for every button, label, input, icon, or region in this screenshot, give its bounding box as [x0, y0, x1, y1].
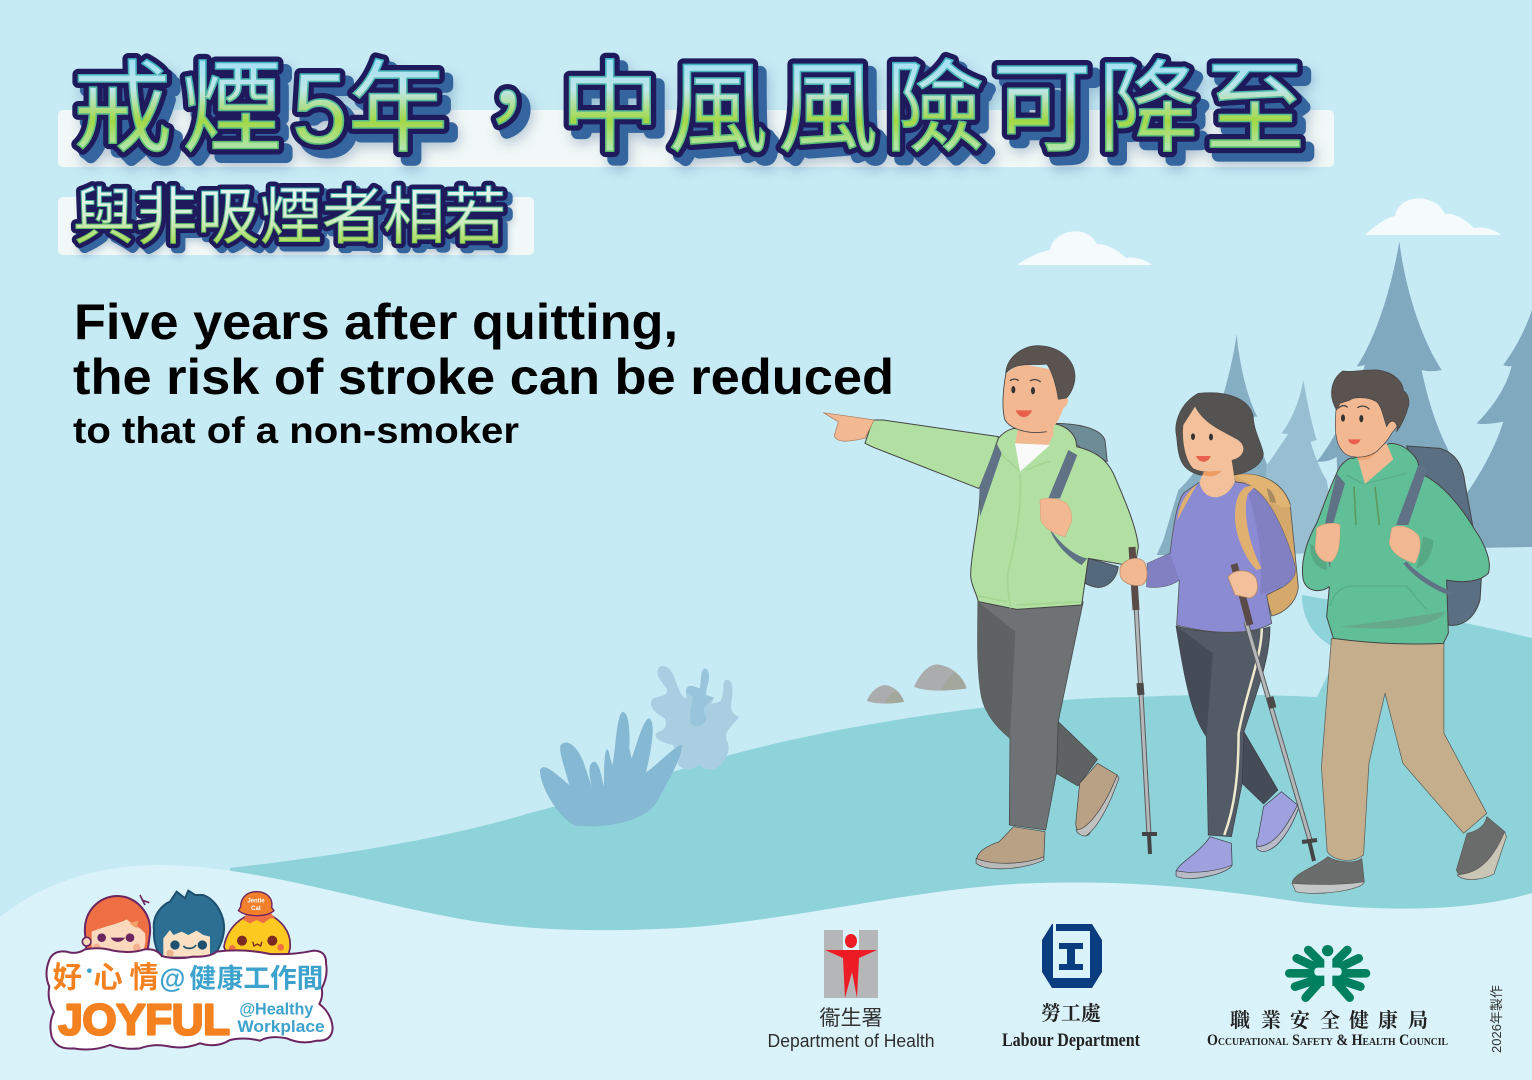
- rocks: [867, 664, 967, 704]
- chest hand: [1040, 498, 1072, 537]
- subtitle banner: white strip: [58, 197, 534, 255]
- hand on right pole: [1228, 571, 1258, 598]
- logo Chinese text: healthy workplace: @健康工作間: [159, 963, 323, 993]
- pointing arm: [865, 420, 998, 488]
- mascot: Jentle Cat: [224, 892, 290, 955]
- mascot: Jentle Cat: Cat: [251, 906, 261, 912]
- title banner: white strip: [58, 110, 1334, 167]
- title: Chinese headline: 戒煙5年，中風風險可降至: [72, 53, 1305, 165]
- logo: Occupational Safety and Health Council: 職業安全健康局: [1230, 1009, 1428, 1032]
- logo: Occupational Safety and Health Council: Occupational Safety & Health Council: [1207, 1032, 1448, 1049]
- icon: Labour Department mark: [1042, 924, 1102, 988]
- hill: pale foreground: [0, 865, 1532, 1080]
- icon: OSHC mark: [1289, 945, 1366, 1000]
- neck and shirt: [1015, 423, 1053, 445]
- mascot: girl: [82, 895, 150, 955]
- logo: Department of Health: 衞生署: [820, 1007, 882, 1030]
- upper body: [1302, 370, 1489, 644]
- subtitle: Chinese line: 與非吸煙者相若: [73, 183, 506, 252]
- person: woman in purple top: [1147, 393, 1299, 879]
- leggings and shoes: [1176, 626, 1299, 879]
- subtitle: Chinese line: 與非吸煙者相若: [73, 183, 506, 252]
- logo: Labour Department: Labour Department: [1002, 1030, 1141, 1051]
- title: Chinese headline: 戒煙5年，中風風險可降至: [80, 61, 1313, 173]
- mascot: Jentle Cat: Jentle: [247, 899, 265, 905]
- neck and face: [1357, 443, 1393, 484]
- upper body: [1147, 393, 1298, 632]
- mascot: boy: [154, 891, 224, 957]
- plant: pale bush: [651, 666, 739, 769]
- trousers and shoes: [976, 602, 1119, 869]
- tree: far left: [1157, 334, 1273, 555]
- logo English text: @Healthy: [239, 1000, 314, 1019]
- logo: Labour Department: [1002, 924, 1141, 1051]
- hands: [1315, 523, 1420, 563]
- clouds: [1017, 198, 1501, 265]
- hill: teal ground: [230, 595, 1532, 1000]
- tree: middle: [1260, 380, 1340, 555]
- logo: Labour Department: 勞工處: [1041, 1002, 1101, 1025]
- logo: Occupational Safety and Health Council: [1207, 945, 1448, 1049]
- logo Chinese text: 情: [129, 961, 159, 994]
- logo dot: [87, 968, 92, 973]
- logo: Department of Health: [768, 930, 934, 1051]
- straps: [979, 443, 1077, 517]
- trees: big centre and right edge: [1317, 242, 1532, 555]
- hiking pole: left: [1132, 547, 1157, 854]
- logo: Department of Health: Department of Health: [768, 1031, 934, 1051]
- logo Chinese text: 心: [93, 961, 123, 994]
- logo JOYFUL text: JOYFUL: [58, 996, 230, 1045]
- subtitle: Chinese line: 與非吸煙者相若: [78, 191, 511, 260]
- logo badge shape: [46, 948, 333, 1049]
- pine trees: [1157, 242, 1532, 555]
- trousers and shoes: [1292, 638, 1506, 893]
- hill: light snow band: [1150, 547, 1532, 700]
- logo: Joyful @ Healthy Workplace: [46, 891, 333, 1049]
- person: man in light green jacket, pointing: [823, 346, 1138, 869]
- hiking pole: right: [1234, 564, 1317, 861]
- icon: Department of Health mark: [824, 930, 878, 998]
- person: man in green hoodie, right: [1292, 370, 1506, 893]
- face: [1003, 363, 1068, 433]
- production year note: 2026年製作: [1489, 985, 1504, 1053]
- English headline: to that of a non-smoker: [73, 410, 519, 451]
- title: Chinese headline: 戒煙5年，中風風險可降至: [81, 65, 1314, 177]
- subtitle: Chinese line: 與非吸煙者相若: [78, 188, 511, 257]
- hand on left pole: [1120, 558, 1147, 586]
- logo: Joyful @ Healthy Workplace: Workplace: [237, 1017, 325, 1036]
- English headline: [73, 294, 894, 451]
- backpack straps: [1325, 465, 1427, 525]
- English headline: Five years after quitting,: [74, 294, 678, 350]
- English headline: the risk of stroke can be reduced: [73, 349, 894, 405]
- logo Chinese text: 好: [53, 961, 82, 994]
- hoodie strings: [1354, 487, 1379, 525]
- title: Chinese headline: 戒煙5年，中風風險可降至: [72, 53, 1305, 165]
- jacket: [971, 423, 1138, 609]
- plant: blue bush: [540, 712, 682, 826]
- upper body: [823, 346, 1138, 609]
